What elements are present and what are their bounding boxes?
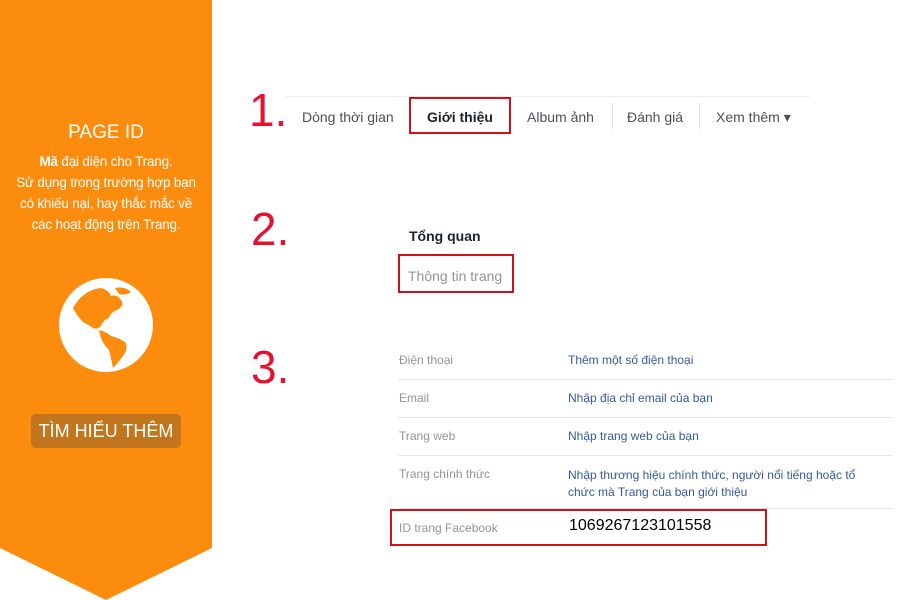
text: ID trang Facebook bbox=[399, 521, 498, 535]
button: tìm hiểu thêm bbox=[31, 414, 181, 448]
panel: orange sidebar bbox=[0, 0, 212, 600]
button: tìm hiểu thêm: TÌM HIỂU THÊM bbox=[39, 421, 173, 441]
text: Giới thiệu bbox=[427, 109, 493, 125]
text block: description: Sử dụng trong trường hợp bạn bbox=[16, 175, 196, 190]
row: Email: Email bbox=[399, 391, 429, 405]
info table: Thêm một số điện thoại bbox=[568, 353, 693, 367]
nav: Dòng thời gian: Dòng thời gian bbox=[302, 109, 394, 125]
text block: description: Mã đại diện cho Trang. bbox=[40, 154, 172, 169]
row: Trang web: Trang web bbox=[399, 429, 455, 443]
heading: Tổng quan: Tổng quan bbox=[409, 228, 481, 244]
step number 2: 2. bbox=[251, 203, 289, 255]
text block: description bbox=[16, 154, 196, 232]
info table: Nhập thương hiệu chính thức, người nổi tiếng hoặc tổ bbox=[568, 468, 855, 482]
text block: description: các hoạt động trên Trang. bbox=[32, 217, 180, 232]
text: Thông tin trang bbox=[408, 268, 502, 284]
text: 1069267123101558 bbox=[569, 517, 711, 534]
info table: Nhập trang web của bạn bbox=[568, 429, 699, 443]
highlighted: Thông tin trang bbox=[398, 254, 514, 293]
info table bbox=[398, 353, 892, 509]
info table: Nhập địa chỉ email của bạn bbox=[568, 391, 713, 405]
row: Trang chính thức: Trang chính thức bbox=[399, 467, 490, 481]
nav: Giới thiệu (highlighted) bbox=[409, 97, 511, 134]
nav bar bbox=[285, 96, 810, 97]
step number 3: 3. bbox=[251, 341, 289, 393]
text block: description: có khiếu nại, hay thắc mắc về bbox=[20, 196, 192, 211]
info table: chức mà Trang của bạn giới thiệu bbox=[568, 485, 747, 499]
step number 1: 1. bbox=[249, 84, 287, 136]
row: Điện thoại: Điện thoại bbox=[399, 353, 453, 367]
highlighted: ID trang Facebook bbox=[390, 509, 767, 546]
nav: Album ảnh: Album ảnh bbox=[527, 109, 594, 125]
heading: PAGE ID: PAGE ID bbox=[68, 122, 144, 143]
nav: Đánh giá: Đánh giá bbox=[627, 109, 683, 125]
icon: globe bbox=[59, 278, 153, 372]
nav: Xem thêm: Xem thêm ▾ bbox=[716, 109, 791, 125]
